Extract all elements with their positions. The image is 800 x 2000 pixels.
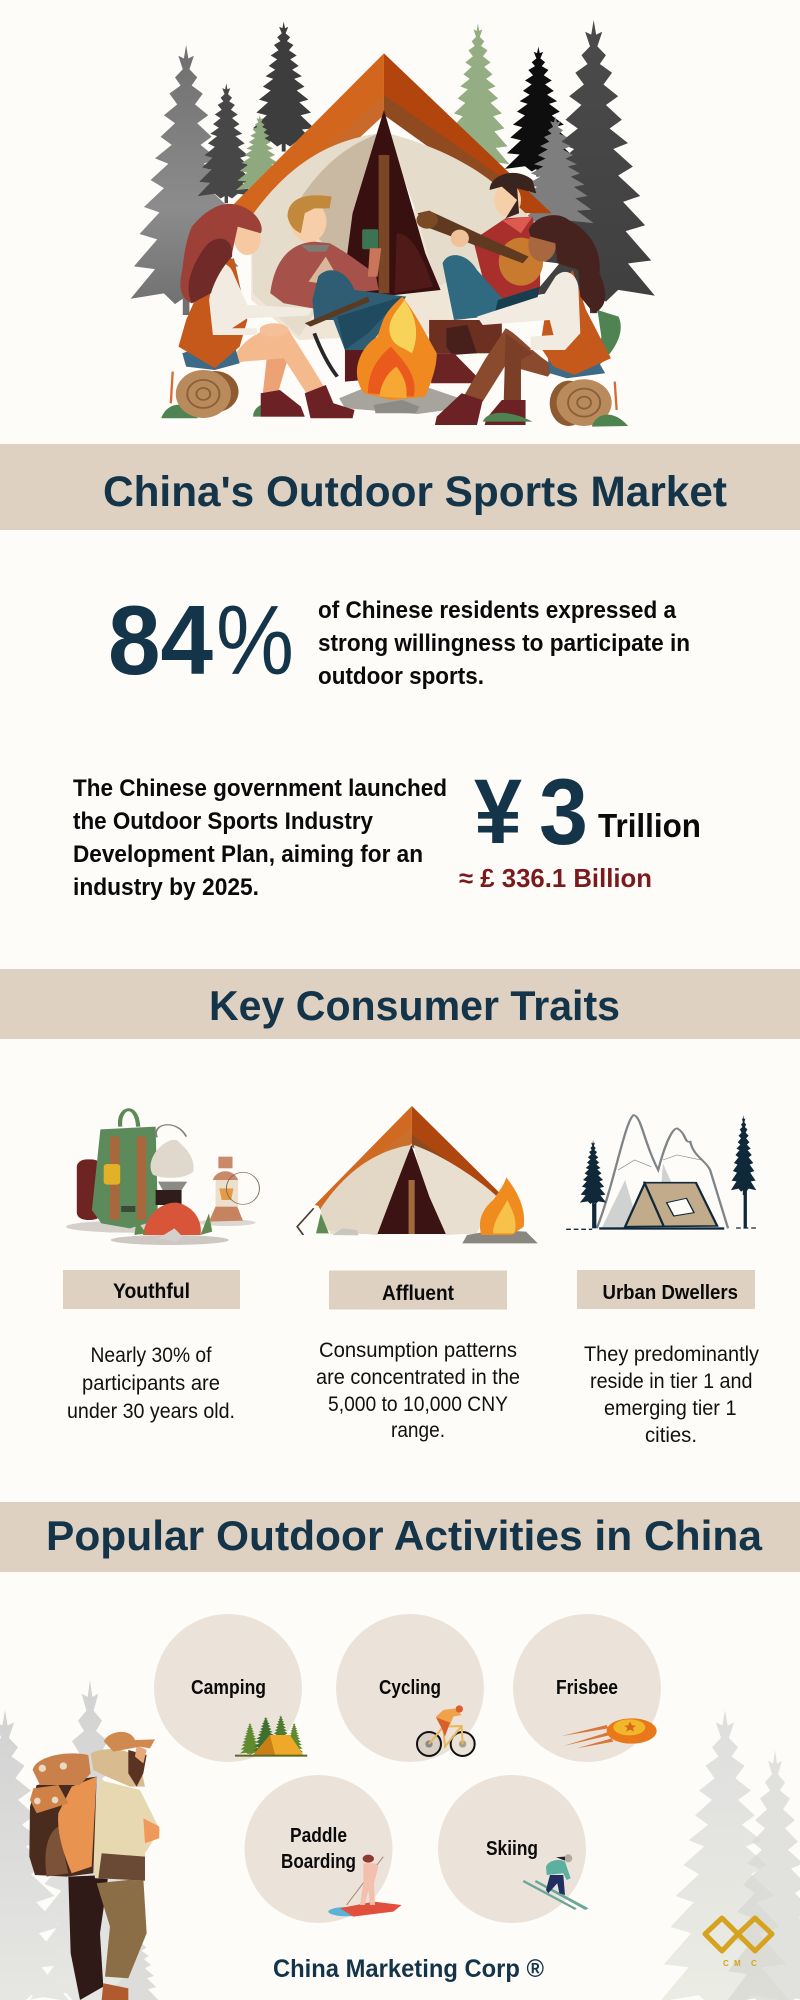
trait label: Affluent	[382, 1282, 454, 1305]
man with mug	[270, 195, 406, 382]
circle: skiing: Skiing	[486, 1838, 538, 1860]
stat description: outdoor sports.	[318, 663, 484, 690]
trait description	[67, 1344, 235, 1423]
section banner: Key Consumer Traits	[0, 969, 800, 1039]
value in pounds: ≈ £ 336.1 Billion	[459, 863, 652, 893]
panel: urban dwellers	[566, 1115, 759, 1447]
circle: camping: Camping	[191, 1677, 266, 1699]
icon: tent, mountains and pines	[566, 1115, 758, 1230]
stat: government plan	[73, 759, 701, 901]
trait label	[329, 1270, 507, 1310]
big number: 84	[108, 585, 213, 695]
icon: skier	[523, 1854, 589, 1910]
circle: cycling: Cycling	[379, 1677, 441, 1699]
plan description: The Chinese government launched	[73, 775, 447, 802]
stat description: strong willingness to participate in	[318, 630, 690, 657]
logo: CMC: C	[751, 1959, 757, 1968]
man with guitar	[416, 173, 543, 383]
section banner: China's Outdoor Sports Market	[0, 444, 800, 530]
big number: %	[216, 585, 294, 695]
circle: frisbee	[513, 1614, 661, 1762]
trait description: They predominantly	[584, 1343, 759, 1366]
background trees: bottom left	[0, 1680, 160, 2000]
woman on the right	[435, 215, 621, 425]
trait description: Nearly 30% of	[90, 1344, 212, 1367]
illustration: hiker with backpack	[29, 1732, 160, 2000]
icon: tent with campfire	[297, 1106, 538, 1243]
section banner: Key Consumer Traits: Key Consumer Traits	[209, 982, 620, 1029]
logo: CMC: M	[734, 1959, 741, 1968]
big number	[108, 585, 294, 695]
pine trees behind tent	[131, 20, 655, 315]
plan description	[73, 775, 447, 901]
plan description: the Outdoor Sports Industry	[73, 808, 374, 835]
value: 3 trillion yuan: Trillion	[598, 807, 701, 844]
trait description: are concentrated in the	[316, 1366, 520, 1389]
tent	[234, 53, 552, 340]
panel: affluent	[297, 1106, 538, 1442]
stat description	[318, 597, 690, 690]
trait description: Consumption patterns	[319, 1339, 517, 1362]
left log and plants	[161, 370, 305, 418]
campfire	[339, 297, 460, 414]
section banner: Popular Outdoor Activities in China: Popular Outdoor Activities in China	[46, 1512, 763, 1559]
trait label: Youthful	[113, 1280, 190, 1303]
circle: paddle boarding: Paddle	[290, 1825, 347, 1847]
trait description: under 30 years old.	[67, 1400, 235, 1423]
value: 3 trillion yuan	[474, 759, 701, 864]
background trees: bottom right	[660, 1710, 800, 2000]
trait description: range.	[391, 1419, 445, 1442]
trait description	[584, 1343, 759, 1447]
panel: youthful	[63, 1110, 259, 1423]
trait description: cities.	[645, 1424, 697, 1447]
section banner: Popular Outdoor Activities in China	[0, 1502, 800, 1572]
circle: paddle boarding	[244, 1775, 402, 1923]
trait description: emerging tier 1	[604, 1397, 736, 1420]
trait label: Urban Dwellers	[602, 1282, 738, 1304]
plan description: industry by 2025.	[73, 874, 259, 901]
woman on the left	[178, 204, 354, 418]
icon: backpack, kettle and lantern	[66, 1110, 259, 1245]
circle: skiing	[438, 1775, 589, 1923]
circle: camping	[154, 1614, 307, 1762]
icon: tent and trees	[235, 1715, 307, 1757]
trait label	[577, 1270, 755, 1309]
section banner: China's Outdoor Sports Market: China's Outdoor Sports Market	[103, 468, 727, 516]
right log and plants	[483, 379, 628, 427]
icon: flying frisbee	[562, 1718, 657, 1748]
trait description: 5,000 to 10,000 CNY	[328, 1393, 508, 1416]
trait description	[316, 1339, 520, 1442]
circle: cycling	[336, 1614, 484, 1762]
footer: company name: China Marketing Corp ®	[273, 1955, 545, 1983]
icon: cyclist	[417, 1705, 475, 1756]
value: 3 trillion yuan: 3	[539, 759, 588, 864]
plan description: Development Plan, aiming for an	[73, 841, 423, 868]
stat: 84 percent	[108, 585, 690, 695]
circle: frisbee: Frisbee	[556, 1677, 618, 1699]
trait label	[63, 1270, 240, 1309]
stat description: of Chinese residents expressed a	[318, 597, 677, 624]
circle: paddle boarding: Boarding	[281, 1851, 356, 1873]
logo: CMC	[705, 1918, 772, 1968]
hero illustration: friends camping by a tent and campfire	[131, 20, 655, 427]
value: 3 trillion yuan: ¥	[474, 761, 522, 863]
trait description: reside in tier 1 and	[590, 1370, 752, 1393]
trait description: participants are	[82, 1372, 220, 1395]
logo: CMC: C	[723, 1959, 729, 1968]
icon: paddle boarder	[328, 1855, 402, 1917]
